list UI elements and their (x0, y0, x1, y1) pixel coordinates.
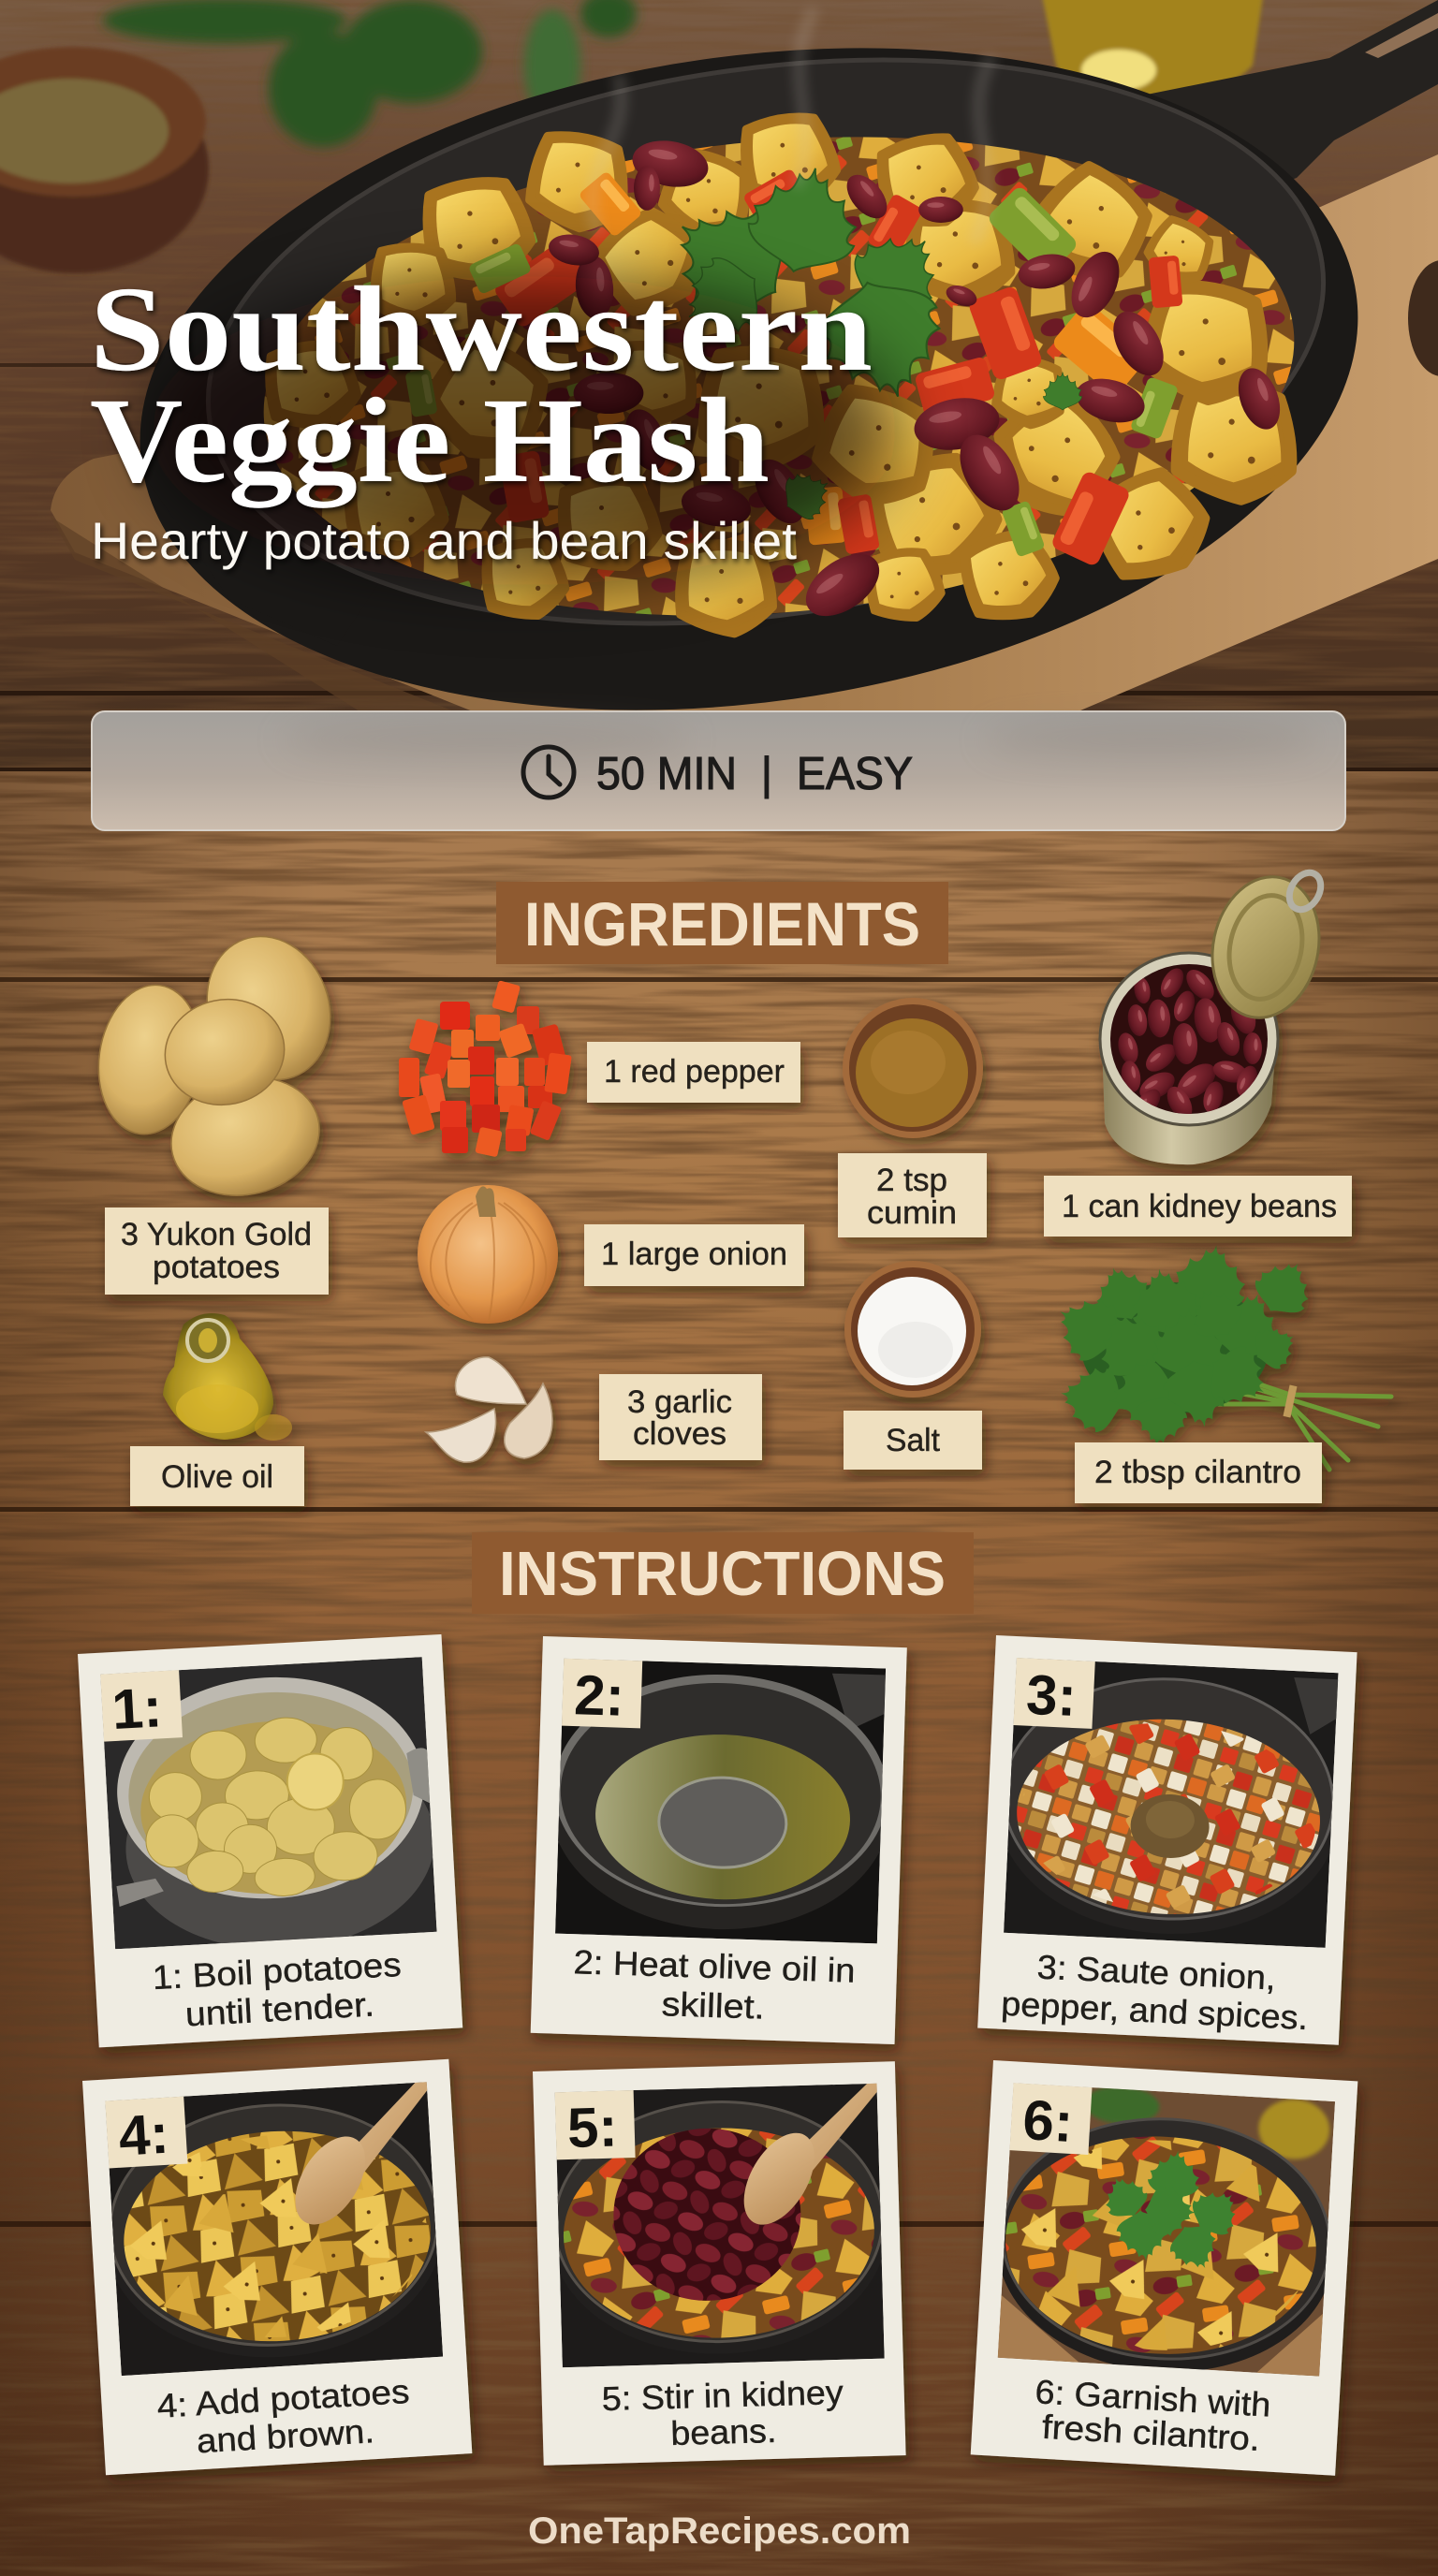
potatoes (270, 117, 1308, 638)
step card 5 (533, 2061, 906, 2466)
label: 3 garlic cloves: 3 garlic (627, 1384, 732, 1420)
step number 2: 2: (573, 1663, 625, 1728)
label: 2 tsp cumin: 2 tsp (876, 1163, 947, 1198)
label: 3 Yukon Gold potatoes: potatoes (153, 1250, 280, 1285)
ingredient: diced red pepper (399, 980, 572, 1157)
step card 4 (82, 2059, 472, 2475)
dim behind title (150, 276, 899, 585)
title (90, 262, 873, 508)
label: 1 red pepper (587, 1042, 800, 1103)
step text 5: 5: Stir in kidney (601, 2373, 844, 2418)
label: 1 can kidney beans: 1 can kidney beans (1062, 1189, 1337, 1224)
heading: instructions: INSTRUCTIONS (499, 1539, 946, 1609)
step text 1: until tender. (184, 1984, 375, 2033)
step text 2: 2: Heat olive oil in (573, 1942, 856, 1990)
label: 1 can kidney beans (1044, 1176, 1352, 1237)
step card 3 (977, 1635, 1357, 2045)
label: 1 large onion (584, 1224, 804, 1286)
skillet handle (1105, 0, 1438, 206)
peppers (404, 168, 1182, 567)
ingredient: garlic cloves (426, 1357, 552, 1462)
label: 3 Yukon Gold potatoes (105, 1208, 329, 1295)
label: 2 tsp cumin: cumin (867, 1195, 957, 1231)
step number 6: 6: (1021, 2088, 1075, 2154)
subtitle: Hearty potato and bean skillet (91, 511, 797, 570)
step text 1: 1: Boil potatoes (152, 1945, 403, 1997)
step number 5 (555, 2090, 636, 2159)
step text 4: and brown. (196, 2411, 375, 2460)
step text 2: skillet. (661, 1984, 765, 2027)
step card 1 (78, 1634, 462, 2047)
cilantro garnish (649, 157, 1082, 527)
label: 2 tbsp cilantro (1075, 1442, 1322, 1503)
ingredient: potatoes (89, 919, 350, 1211)
hero photo: skillet on cutting board (0, 0, 1438, 784)
step card 2 (531, 1636, 907, 2044)
label: olive oil (130, 1446, 304, 1506)
label: salt: Salt (886, 1423, 941, 1458)
label: salt (844, 1411, 982, 1470)
ingredient: can of kidney beans (1100, 867, 1332, 1164)
title: Southwestern (90, 262, 873, 397)
oil bottle in background (1041, 0, 1264, 103)
step text 4 (156, 2372, 413, 2463)
label: 1 red pepper: 1 red pepper (604, 1054, 785, 1090)
step text 5 (601, 2373, 844, 2454)
footer website: OneTapRecipes.com (528, 2510, 911, 2552)
step number 4 (105, 2097, 187, 2168)
time and difficulty text: 50 MIN | EASY (596, 749, 913, 799)
title: Veggie Hash (90, 373, 770, 508)
wood background (0, 768, 1438, 2576)
blurred cilantro in background (103, 0, 637, 147)
step number 5: 5: (566, 2096, 618, 2159)
ingredient: onion (418, 1185, 558, 1324)
beans in can (1118, 968, 1262, 1114)
step text 3: pepper, and spices. (1001, 1984, 1309, 2037)
spice bowl in background (0, 47, 209, 273)
photo: browning potatoes (97, 2077, 450, 2377)
step number 1: 1: (110, 1676, 164, 1741)
label: 1 large onion: 1 large onion (601, 1237, 787, 1272)
label: olive oil: Olive oil (161, 1459, 273, 1495)
label: 3 Yukon Gold potatoes: 3 Yukon Gold (121, 1217, 312, 1252)
ingredient: cumin bowl (843, 998, 983, 1138)
step text 3 (1001, 1946, 1311, 2037)
heading: ingredients: INGREDIENTS (524, 889, 920, 959)
cilantro garnish (1092, 2144, 1253, 2282)
wooden spoon (273, 2077, 442, 2239)
step text 1 (152, 1945, 404, 2035)
icon: clock (523, 747, 574, 798)
wooden spoon (726, 2079, 888, 2238)
beans (546, 135, 1287, 629)
step text 4: 4: Add potatoes (156, 2372, 410, 2425)
hash food mass (243, 96, 1314, 656)
photo: boiling potatoes (100, 1657, 442, 1958)
step number 6 (1009, 2083, 1092, 2155)
steam (592, 9, 992, 243)
time and difficulty banner (92, 711, 1345, 830)
skillet body (96, 0, 1401, 784)
step number 4: 4: (117, 2102, 170, 2168)
can lid and pull ring (1199, 867, 1332, 1028)
step text 3: 3: Saute onion, (1036, 1947, 1277, 1997)
photo: stirring in kidney beans (546, 2079, 891, 2367)
ingredient: salt bowl (844, 1261, 981, 1398)
step text 6: 6: Garnish with (1034, 2372, 1271, 2424)
label: 2 tsp cumin (838, 1153, 987, 1237)
photo: oil in skillet (546, 1658, 895, 1944)
ingredient: cilantro bunch (1044, 1238, 1391, 1470)
ingredient: olive oil bottle (163, 1313, 292, 1441)
step number 2 (562, 1659, 642, 1728)
step number 1 (100, 1670, 183, 1742)
label: 2 tbsp cilantro: 2 tbsp cilantro (1094, 1455, 1301, 1490)
step number 3 (1013, 1658, 1095, 1729)
hero table (0, 0, 1438, 769)
photo: garnished skillet (990, 2080, 1343, 2381)
step text 6: fresh cilantro. (1041, 2408, 1261, 2458)
label: 3 garlic cloves (599, 1374, 762, 1460)
can body (1100, 953, 1278, 1164)
label: 3 garlic cloves: cloves (633, 1416, 726, 1452)
step text 5: beans. (670, 2411, 777, 2452)
step number 3: 3: (1025, 1663, 1078, 1728)
step card 6 (971, 2060, 1357, 2476)
photo: sauteed vegetables and spices (991, 1657, 1345, 1948)
step text 2 (572, 1942, 856, 2029)
cutting board (51, 154, 1438, 713)
step text 6 (1032, 2372, 1271, 2459)
